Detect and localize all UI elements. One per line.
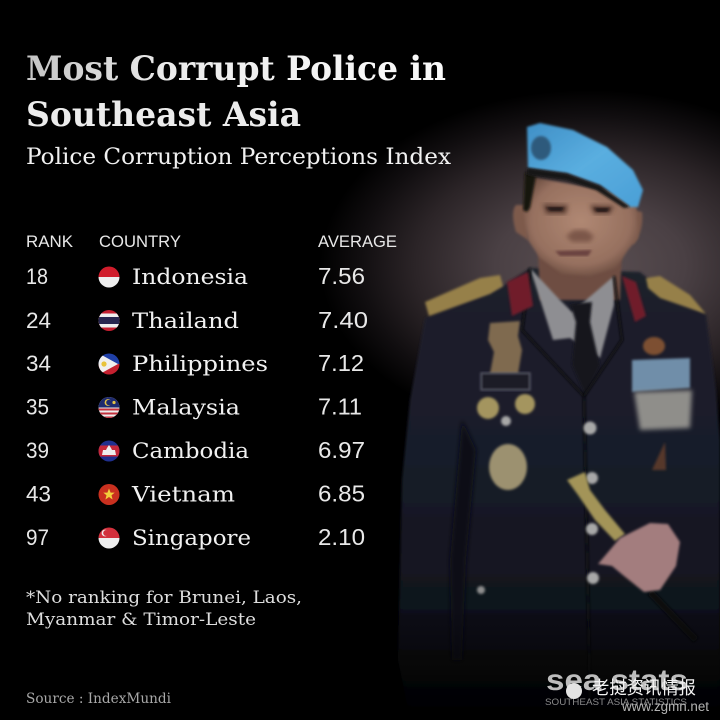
beret badge: [531, 136, 551, 160]
flag: Indonesia: [98, 266, 120, 288]
flag: Philippines: [98, 353, 120, 375]
baton shaft: [650, 592, 696, 640]
flag: Cambodia: [98, 440, 120, 462]
uniform body: [398, 268, 720, 720]
table headers: [26, 233, 397, 251]
title line 1: Most Corrupt Police in: [26, 49, 446, 89]
row: Cambodia: Cambodia: [132, 439, 249, 464]
row: Cambodia: 6.97: [318, 437, 365, 463]
medal cluster right: [634, 390, 692, 430]
footnote: Myanmar & Timor-Leste: [26, 610, 256, 630]
title: [26, 49, 446, 135]
shirt collar: [530, 268, 614, 358]
rank insignia: [488, 321, 522, 374]
watermark: sea stats logo: sea stats: [546, 664, 688, 697]
watermark: wechat source: 老挝资讯情报: [592, 678, 696, 698]
row: Singapore: Singapore: [132, 526, 251, 551]
beret band: [527, 168, 630, 208]
epaulette right: [646, 276, 706, 314]
row: Cambodia: [26, 440, 364, 462]
jacket front line: [522, 268, 590, 700]
medals left: [477, 394, 535, 419]
wechat icon: [566, 683, 582, 699]
large medal: [489, 444, 527, 490]
row: Indonesia: [28, 266, 364, 288]
row: Singapore: [27, 528, 364, 550]
watermark: sea stats logo: [545, 664, 688, 708]
header country: COUNTRY: [99, 233, 181, 251]
flag: Singapore: [98, 527, 120, 549]
source: Source : IndexMundi: [26, 691, 172, 707]
red collar tab left: [507, 272, 533, 316]
epaulette left: [425, 275, 503, 316]
row: Vietnam: Vietnam: [131, 482, 235, 508]
row: Indonesia: Indonesia: [132, 265, 248, 290]
nose shadow: [566, 230, 594, 242]
badge right: [643, 337, 665, 355]
ears: [513, 205, 642, 244]
row: Singapore: 97: [26, 525, 49, 550]
baton: [567, 472, 625, 541]
watermark: wechat source: www.zgmn.net: [621, 699, 709, 714]
flag: Thailand: [98, 310, 120, 332]
row: Vietnam: 43: [26, 482, 51, 506]
row: Indonesia: 7.56: [318, 263, 365, 289]
header average: AVERAGE: [318, 233, 397, 251]
row: Cambodia: 39: [26, 438, 49, 463]
row: Malaysia: 35: [26, 394, 49, 420]
row: Thailand: 24: [26, 308, 51, 333]
watermark: wechat source: [566, 678, 709, 714]
flag: Vietnam: [98, 484, 120, 506]
cuff pin: [652, 442, 666, 470]
row: Vietnam: 6.85: [318, 480, 365, 506]
flag: Malaysia: [98, 396, 120, 418]
ribbon bar: [632, 358, 690, 392]
subtitle: Police Corruption Perceptions Index: [26, 144, 451, 170]
photo backdrop: [300, 80, 720, 460]
row: Philippines: [26, 354, 363, 376]
row: Thailand: [27, 310, 367, 331]
row: Philippines: Philippines: [132, 352, 268, 377]
row: Philippines: 7.12: [318, 350, 364, 376]
sleeve fold: [450, 420, 476, 660]
eyes: [546, 207, 610, 212]
row: Malaysia: [26, 397, 361, 420]
row: Vietnam: [26, 484, 364, 505]
row: Malaysia: Malaysia: [132, 396, 240, 420]
name tag: [481, 373, 530, 390]
row: Philippines: 34: [26, 351, 51, 376]
buttons: [477, 416, 599, 594]
title line 2: Southeast Asia: [26, 95, 301, 135]
ranking table: [26, 263, 368, 551]
row: Singapore: 2.10: [318, 524, 365, 550]
row: Malaysia: 7.11: [318, 394, 362, 420]
eye shadows: [543, 204, 614, 214]
beret: [527, 123, 643, 207]
hand: [598, 523, 680, 592]
head: [524, 176, 638, 276]
bottom fade: [390, 610, 720, 720]
row: Thailand: 7.40: [318, 307, 368, 333]
header rank: RANK: [26, 233, 73, 251]
watermark: sea stats logo: SOUTHEAST ASIA STATISTICS: [545, 697, 687, 708]
footnote: *No ranking for Brunei, Laos,: [26, 588, 302, 608]
red collar tab right: [622, 276, 646, 322]
necktie: [570, 302, 600, 395]
row: Thailand: Thailand: [132, 309, 239, 334]
neck: [538, 250, 622, 300]
portrait: police officer: [390, 123, 720, 720]
hair: [523, 172, 536, 212]
footnote: [26, 588, 302, 630]
row: Indonesia: 18: [26, 264, 48, 289]
mouth: [555, 250, 592, 256]
